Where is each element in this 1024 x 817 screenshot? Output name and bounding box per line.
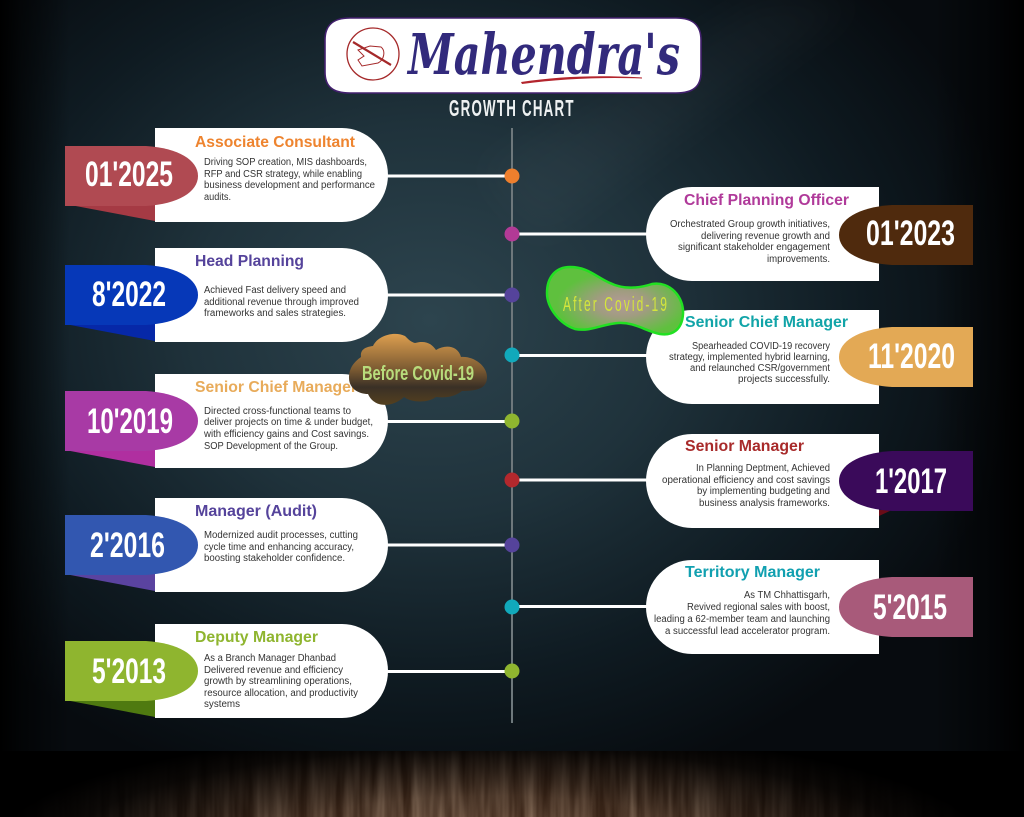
timeline dots — [504, 168, 520, 678]
panel: Territory Manager 5'2015: a successful lead accelerator program. — [665, 626, 830, 637]
panel: Head Planning 8'2022: Head Planning — [195, 253, 304, 270]
panel: Senior Chief Manager 10'2019: Senior Chief Manager — [195, 379, 357, 396]
panel: Senior Manager 1'2017: 1'2017 — [875, 462, 947, 501]
panel: Deputy Manager 5'2013: As a Branch Manager Dhanbad — [204, 653, 336, 664]
panel: Territory Manager 5'2015: leading a 62-member team and launching — [654, 614, 830, 625]
panel: Territory Manager 5'2015: Territory Manager — [685, 564, 820, 581]
icon: hand with pen — [347, 28, 399, 80]
wooden floor — [0, 751, 1024, 817]
panel: Senior Chief Manager 11'2020: Spearheaded COVID-19 recovery — [692, 341, 830, 352]
panel: Chief Planning Officer 01'2023: Chief Planning Officer — [684, 192, 849, 209]
panel: Senior Chief Manager 10'2019: with efficiency gains and Cost savings. — [203, 429, 369, 440]
panel: Senior Chief Manager 11'2020: strategy, implemented hybrid learning, — [669, 352, 830, 363]
panel: Territory Manager 5'2015: 5'2015 — [873, 588, 947, 627]
callout: Before Covid-19 cloud: Before Covid-19 — [362, 363, 474, 385]
panel: Associate Consultant 01'2025: Driving SOP creation, MIS dashboards, — [204, 157, 367, 168]
panel: Deputy Manager 5'2013: systems — [204, 699, 240, 710]
panel: Manager (Audit) 2'2016 — [65, 498, 388, 592]
logo plate — [325, 18, 701, 93]
panel: Head Planning 8'2022: 8'2022 — [92, 275, 166, 314]
panel: Senior Manager 1'2017: business analysis frameworks. — [699, 498, 830, 509]
panel: Territory Manager 5'2015: Revived regional sales with boost, — [687, 602, 830, 613]
panel: Manager (Audit) 2'2016: Modernized audit processes, cutting — [204, 530, 358, 541]
panel: Senior Chief Manager 11'2020: projects successfully. — [738, 374, 830, 385]
panel: Senior Chief Manager 10'2019: Directed cross-functional teams to — [204, 406, 351, 417]
panel: Territory Manager 5'2015: As TM Chhattisgarh, — [744, 590, 830, 601]
panel: Manager (Audit) 2'2016: boosting stakeholder confidence. — [204, 553, 345, 564]
panel: Senior Chief Manager 11'2020 — [646, 310, 973, 404]
connector lines — [386, 174, 648, 673]
panel: Senior Chief Manager 11'2020: 11'2020 — [868, 337, 955, 376]
logo — [325, 18, 701, 93]
panel: Senior Chief Manager 10'2019: deliver projects on time & under budget, — [204, 417, 373, 428]
panel: Manager (Audit) 2'2016: cycle time and enhancing accuracy, — [204, 542, 354, 553]
panel: Senior Manager 1'2017: In Planning Deptment, Achieved — [696, 463, 830, 474]
panel: Senior Manager 1'2017: Senior Manager — [685, 438, 804, 455]
panel: Senior Chief Manager 10'2019: SOP Development of the Group. — [204, 441, 338, 452]
panel: Territory Manager 5'2015 — [646, 560, 973, 654]
panel: Chief Planning Officer 01'2023: delivering revenue growth and — [701, 231, 830, 242]
panel: Associate Consultant 01'2025: 01'2025 — [85, 155, 173, 194]
panel: Deputy Manager 5'2013: Deputy Manager — [195, 629, 318, 646]
callout: After Covid-19 blob — [547, 267, 683, 334]
panel: Senior Manager 1'2017: by implementing budgeting and — [697, 486, 830, 497]
panel: Deputy Manager 5'2013: growth by streamlining operations, — [204, 676, 352, 687]
panel: Senior Chief Manager 11'2020: Senior Chief Manager — [685, 314, 848, 331]
panel: Associate Consultant 01'2025: Associate Consultant — [195, 134, 356, 151]
callout: After Covid-19 blob: After Covid-19 — [563, 294, 669, 316]
panel: Head Planning 8'2022: Achieved Fast delivery speed and — [204, 285, 346, 296]
panel: Senior Chief Manager 10'2019: 10'2019 — [87, 402, 173, 441]
panel: Senior Chief Manager 10'2019 — [65, 374, 388, 468]
panel: Senior Manager 1'2017: operational efficiency and cost savings — [662, 475, 830, 486]
panel: Senior Manager 1'2017 — [646, 434, 973, 528]
panel: Chief Planning Officer 01'2023 — [646, 187, 973, 281]
panel: Chief Planning Officer 01'2023: Orchestrated Group growth initiatives, — [670, 219, 830, 230]
panel: Deputy Manager 5'2013: Delivered revenue and efficiency — [204, 665, 343, 676]
timeline axis — [511, 128, 513, 723]
panel: Senior Chief Manager 11'2020: and relaunched CSR/government — [690, 363, 830, 374]
panel: Deputy Manager 5'2013: resource allocation, and productivity — [204, 688, 358, 699]
callout: Before Covid-19 cloud — [349, 334, 487, 405]
panel: Manager (Audit) 2'2016: 2'2016 — [90, 526, 165, 565]
logo wordmark: Mahendra's — [407, 22, 680, 88]
panel: Associate Consultant 01'2025: audits. — [204, 192, 231, 203]
logo underline — [521, 76, 642, 84]
panel: Chief Planning Officer 01'2023: improvements. — [767, 254, 830, 265]
panel: Associate Consultant 01'2025: business development and performance — [204, 180, 375, 191]
panel: Chief Planning Officer 01'2023: significant stakeholder engagement — [678, 242, 830, 253]
panel: Head Planning 8'2022: additional revenue through improved — [204, 297, 359, 308]
panel: Associate Consultant 01'2025 — [65, 128, 388, 222]
panel: Head Planning 8'2022: frameworks and sales strategies. — [204, 308, 346, 319]
panel: Deputy Manager 5'2013 — [65, 624, 388, 718]
panel: Manager (Audit) 2'2016: Manager (Audit) — [195, 503, 317, 520]
panel: Associate Consultant 01'2025: RFP and CSR strategy, while enabling — [204, 169, 362, 180]
title: GROWTH CHART — [449, 95, 575, 121]
panel: Deputy Manager 5'2013: 5'2013 — [92, 652, 166, 691]
panel: Chief Planning Officer 01'2023: 01'2023 — [866, 214, 955, 253]
panel: Head Planning 8'2022 — [65, 248, 388, 342]
